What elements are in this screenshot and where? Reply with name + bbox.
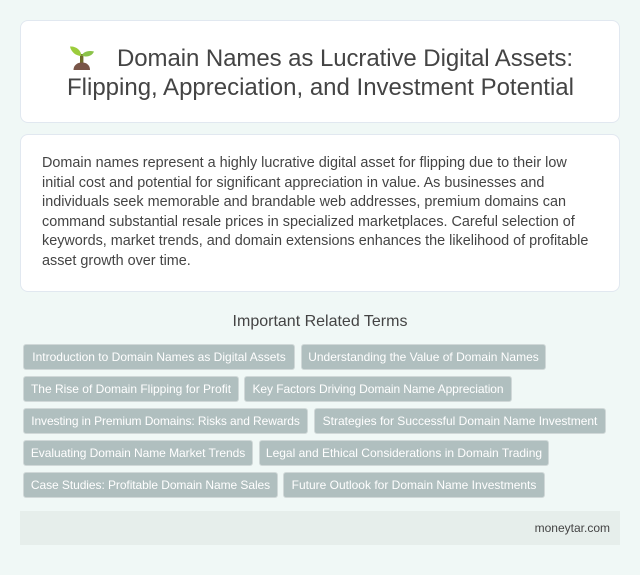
text: keywords, market trends, and domain extensions enhances the likelihood of profitable bbox=[42, 233, 588, 249]
text: command substantial resale prices in specialized marketplaces. Careful selection of bbox=[42, 214, 575, 230]
title card: Flipping, Appreciation, and Investment Potential bbox=[67, 74, 574, 101]
text: Strategies for Successful Domain Name Investment bbox=[323, 414, 597, 428]
text: initial cost and potential for significant appreciation in value. As businesses and bbox=[42, 175, 544, 191]
intro text card bbox=[20, 134, 620, 292]
text: Legal and Ethical Considerations in Domain Trading bbox=[266, 446, 542, 460]
text: Introduction to Domain Names as Digital Assets bbox=[32, 350, 286, 364]
footer bar: moneytar.com bbox=[535, 521, 610, 535]
footer bar bbox=[20, 511, 620, 545]
text: Domain names represent a highly lucrative digital asset for flipping due to their low bbox=[42, 155, 567, 171]
text: individuals seek memorable and brandable web addresses, premium domains can bbox=[42, 194, 566, 210]
intro paragraph bbox=[42, 155, 588, 269]
text: Future Outlook for Domain Name Investments bbox=[292, 478, 536, 492]
text: Key Factors Driving Domain Name Appreciation bbox=[252, 382, 504, 396]
text: Case Studies: Profitable Domain Name Sales bbox=[31, 478, 270, 492]
text: The Rise of Domain Flipping for Profit bbox=[31, 382, 231, 396]
text: Understanding the Value of Domain Names bbox=[308, 350, 539, 364]
text: Evaluating Domain Name Market Trends bbox=[31, 446, 245, 460]
text: asset growth over time. bbox=[42, 253, 191, 269]
related terms heading: Important Related Terms bbox=[233, 313, 407, 330]
title text: Domain Names as Lucrative Digital Assets: bbox=[117, 45, 573, 72]
text: Investing in Premium Domains: Risks and Rewards bbox=[31, 414, 300, 428]
title card bbox=[20, 20, 620, 123]
icon: seedling bbox=[70, 46, 94, 70]
related terms chips bbox=[23, 344, 606, 498]
